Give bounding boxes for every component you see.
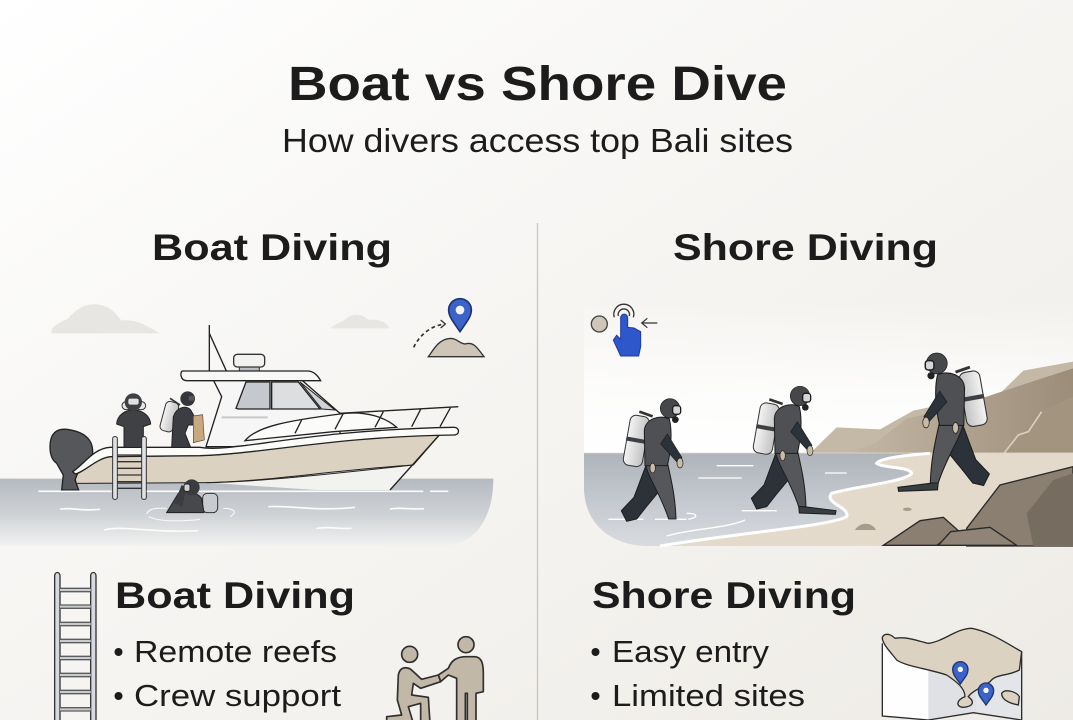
icon: cloud left <box>52 304 159 333</box>
icon: folded map with pins <box>882 628 1022 720</box>
surf and ripples <box>608 453 930 546</box>
far and near cliffs <box>810 362 1073 460</box>
heading: boat diving: Boat Diving <box>152 227 392 268</box>
illustration: boat scene <box>0 299 493 546</box>
waterline and ripples <box>38 491 448 531</box>
rocks on the beach <box>855 467 1073 546</box>
bullet: limited sites: Limited sites <box>612 678 805 713</box>
heading: shore diving: Shore Diving <box>673 227 938 268</box>
diver in the shallows <box>621 399 683 521</box>
sea <box>584 453 930 546</box>
icon: destination pin and island <box>414 299 484 357</box>
sea <box>0 479 493 546</box>
diver stepping out of the water <box>751 386 836 514</box>
icon: tap hand and marker <box>591 304 657 356</box>
icon: cloud right <box>330 315 389 328</box>
sky panel <box>584 300 1073 457</box>
boat <box>50 325 458 490</box>
icon: boat ladder <box>113 437 146 499</box>
subheading: Boat Diving <box>115 575 355 616</box>
sand <box>584 453 1073 546</box>
bullet: easy entry: Easy entry <box>612 634 770 669</box>
diver on the beach <box>898 353 989 491</box>
bullet: remote reefs: Remote reefs <box>134 634 337 669</box>
panel: boat diving summary <box>55 572 483 720</box>
icon: ladder <box>55 572 96 720</box>
diver standing on the stern <box>117 393 151 447</box>
panel: shore diving summary <box>592 575 1022 720</box>
icon: crew helping diver <box>387 637 483 720</box>
diver holding fins <box>159 391 204 447</box>
bullet: crew support: Crew support <box>134 678 341 713</box>
diver in the water <box>167 479 218 513</box>
subtitle: How divers access top Bali sites <box>282 122 793 159</box>
subheading: Shore Diving <box>592 575 856 616</box>
illustration: shore scene <box>584 300 1073 546</box>
title: Boat vs Shore Dive <box>288 58 787 111</box>
